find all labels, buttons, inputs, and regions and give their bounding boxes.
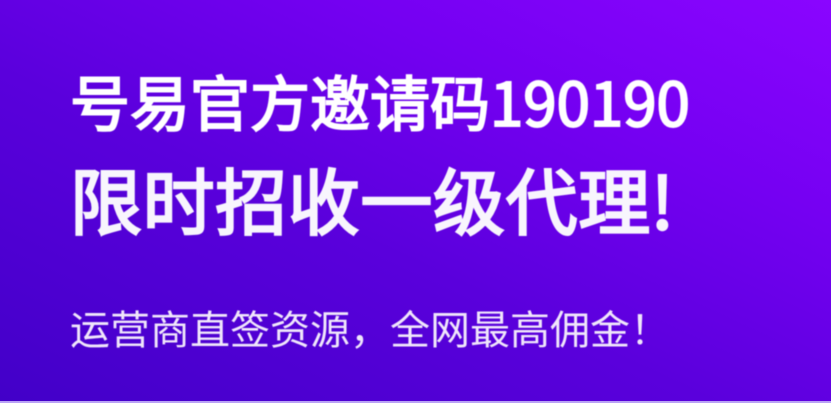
heading: agent recruitment: 限时招收一级代理!: [70, 145, 675, 250]
text block: commission tagline: 运营商直签资源，全网最高佣金！: [70, 298, 670, 356]
heading: invitation code: 号易官方邀请码190190: [70, 57, 690, 144]
